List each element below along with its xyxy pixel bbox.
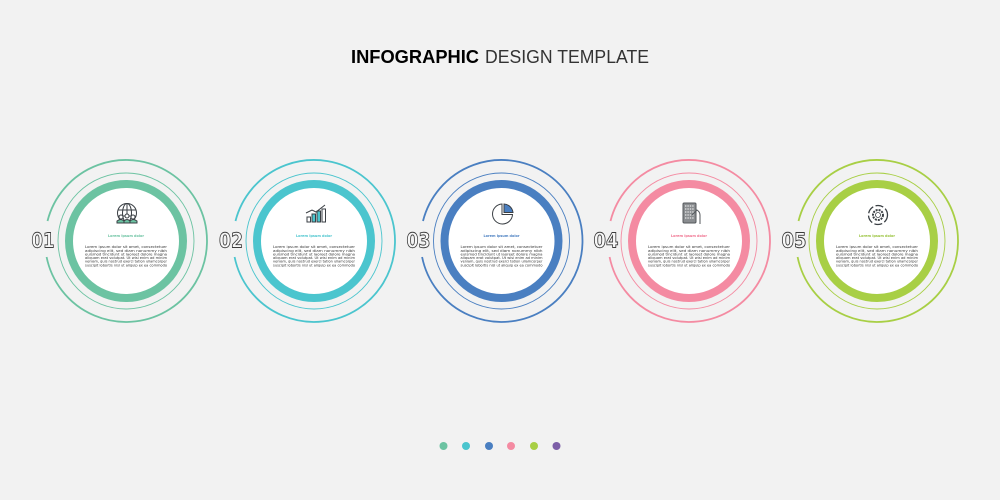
panel: step 03 xyxy=(406,160,582,322)
body text: veniam, quis nostrud exerci tation ullamcorper xyxy=(85,260,168,264)
body text: veniam, quis nostrud exerci tation ullamcorper xyxy=(648,260,731,264)
body text: aliquam erat volutpat. Ut wisi enim ad minim xyxy=(460,256,543,260)
outer ring xyxy=(798,160,958,322)
middle ring xyxy=(621,173,757,309)
panel: step 01 xyxy=(32,160,207,322)
body text: adipiscing elit, sed diam nonummy nibh xyxy=(460,249,542,253)
body text: suscipit lobortis nisl ut aliquip ex ea commodo xyxy=(836,263,918,267)
body text: suscipit lobortis nisl ut aliquip ex ea commodo xyxy=(273,263,355,267)
body text: euismod tincidunt ut laoreet dolore magna xyxy=(836,253,918,257)
outer ring xyxy=(422,160,582,322)
number: 05 xyxy=(782,228,806,252)
body text: Lorem ipsum dolor sit amet, consectetuer xyxy=(85,245,168,249)
body text xyxy=(460,245,543,267)
body text: euismod tincidunt ut laoreet dolore magna xyxy=(648,253,730,257)
icon: pie chart xyxy=(493,204,513,224)
panel: step 05 xyxy=(782,160,958,322)
body text: aliquam erat volutpat. Ut wisi enim ad minim xyxy=(85,256,168,260)
body text: euismod tincidunt ut laoreet dolore magna xyxy=(273,253,355,257)
body text: veniam, quis nostrud exerci tation ullamcorper xyxy=(273,260,356,264)
panel: step 02 xyxy=(219,160,395,322)
body text: adipiscing elit, sed diam nonummy nibh xyxy=(648,249,730,253)
number: 01 xyxy=(32,228,54,252)
body text: suscipit lobortis nisl ut aliquip ex ea commodo xyxy=(648,263,730,267)
body text: euismod tincidunt ut laoreet dolore magna xyxy=(85,253,167,257)
body text: adipiscing elit, sed diam nonummy nibh xyxy=(273,249,355,253)
body text: Lorem ipsum dolor sit amet, consectetuer xyxy=(460,245,543,249)
title: DESIGN TEMPLATE xyxy=(485,47,649,67)
body text xyxy=(648,245,731,267)
body text: Lorem ipsum dolor sit amet, consectetuer xyxy=(273,245,356,249)
body text: Lorem ipsum dolor sit amet, consectetuer xyxy=(648,245,731,249)
icon: bar chart with trend line xyxy=(306,205,326,222)
thick ring with white disc xyxy=(444,184,558,298)
legend dots xyxy=(440,442,560,450)
outer ring xyxy=(47,160,207,322)
outer ring xyxy=(235,160,395,322)
body text: suscipit lobortis nisl ut aliquip ex ea commodo xyxy=(460,263,542,267)
heading: Lorem Ipsum dolor xyxy=(671,234,707,238)
icon: globe with people xyxy=(117,204,137,223)
thick ring with white disc xyxy=(820,184,934,298)
heading: Lorem Ipsum dolor xyxy=(296,234,332,238)
thick ring with white disc xyxy=(257,184,371,298)
body text: veniam, quis nostrud exerci tation ullamcorper xyxy=(836,260,919,264)
middle ring xyxy=(246,173,382,309)
middle ring xyxy=(809,173,945,309)
heading: Lorem Ipsum dolor xyxy=(484,234,520,238)
number: 02 xyxy=(219,228,243,252)
icon: gear with circular arrows xyxy=(868,206,888,224)
body text xyxy=(85,245,168,267)
title: INFOGRAPHIC xyxy=(351,47,479,67)
panel: step 04 xyxy=(594,160,770,322)
body text: Lorem ipsum dolor sit amet, consectetuer xyxy=(836,245,919,249)
body text: aliquam erat volutpat. Ut wisi enim ad minim xyxy=(273,256,356,260)
body text: aliquam erat volutpat. Ut wisi enim ad minim xyxy=(836,256,919,260)
number: 03 xyxy=(406,228,430,252)
title xyxy=(351,47,649,67)
outer ring xyxy=(610,160,770,322)
heading: Lorem Ipsum dolor xyxy=(859,234,895,238)
body text: aliquam erat volutpat. Ut wisi enim ad minim xyxy=(648,256,731,260)
body text: veniam, quis nostrud exerci tation ullamcorper xyxy=(460,260,543,264)
middle ring xyxy=(58,173,194,309)
thick ring with white disc xyxy=(632,184,746,298)
body text xyxy=(273,245,356,267)
body text: euismod tincidunt ut laoreet dolore magna xyxy=(460,253,542,257)
body text: suscipit lobortis nisl ut aliquip ex ea commodo xyxy=(85,263,167,267)
middle ring xyxy=(434,173,570,309)
body text xyxy=(836,245,919,267)
number: 04 xyxy=(594,228,618,252)
body text: adipiscing elit, sed diam nonummy nibh xyxy=(836,249,918,253)
body text: adipiscing elit, sed diam nonummy nibh xyxy=(85,249,167,253)
thick ring with white disc xyxy=(69,184,183,298)
icon: hand holding calculator xyxy=(683,203,700,224)
heading: Lorem Ipsum dolor xyxy=(108,234,144,238)
